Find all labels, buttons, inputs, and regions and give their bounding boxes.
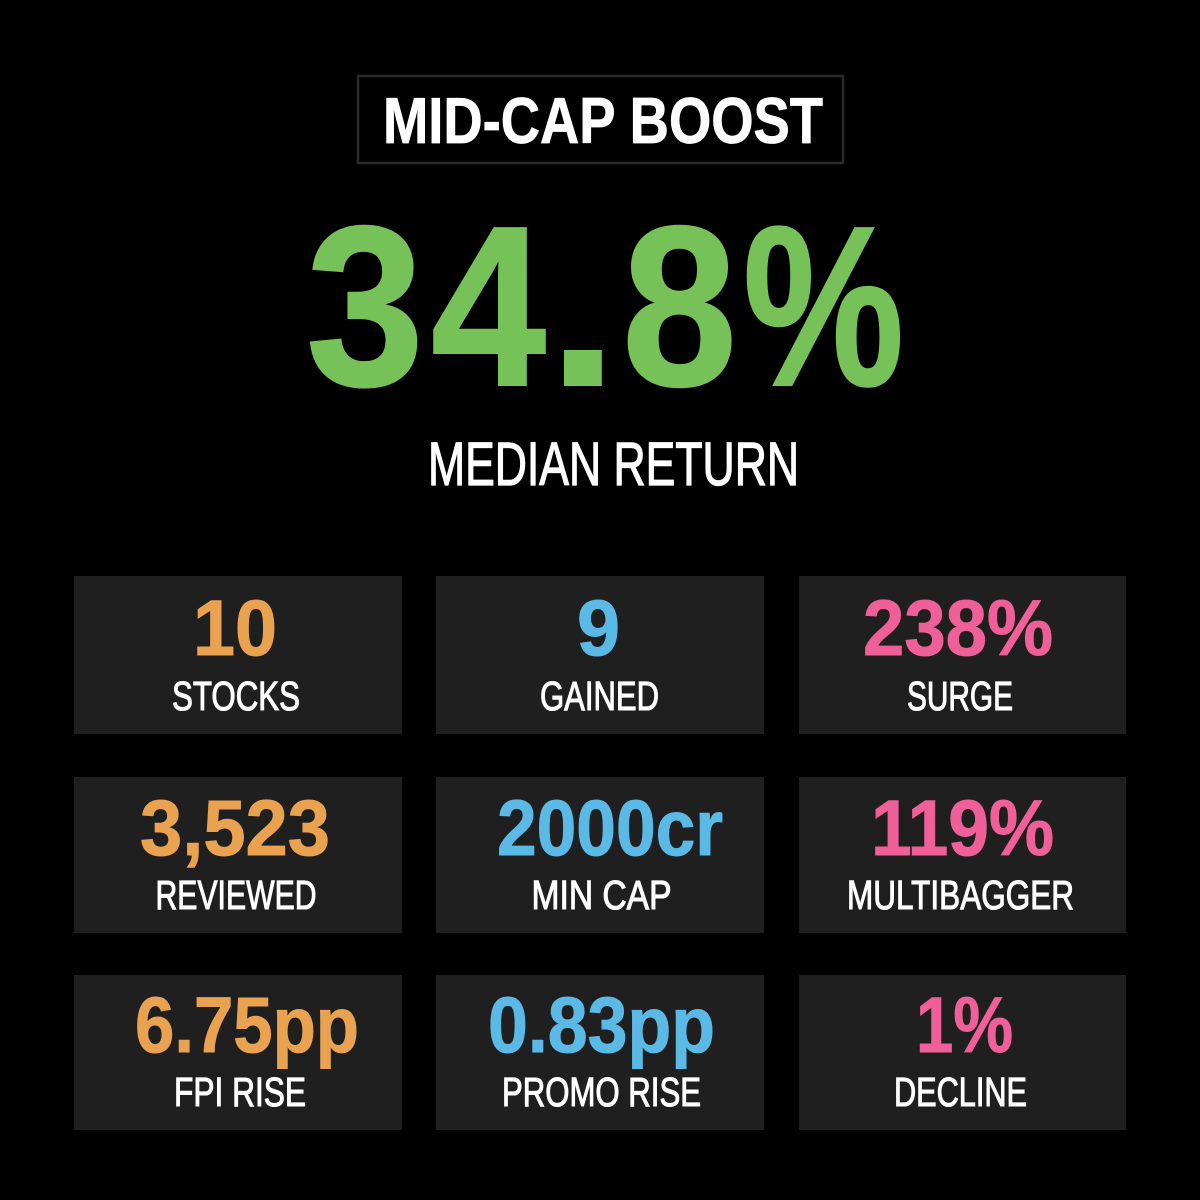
value: 9: [577, 583, 620, 672]
card: stocks: [74, 576, 402, 734]
label: PROMO RISE: [502, 1069, 701, 1115]
value: 0.83pp: [488, 980, 715, 1069]
label: GAINED: [540, 673, 659, 719]
value: 1%: [916, 980, 1013, 1069]
card: fpi rise: [74, 975, 402, 1130]
headline value: 4: [431, 180, 546, 434]
card: promo rise: [436, 975, 764, 1130]
label: SURGE: [907, 673, 1013, 719]
label: REVIEWED: [156, 872, 316, 918]
value: 2000cr: [497, 783, 723, 872]
value: 10: [193, 583, 277, 672]
value: 238%: [863, 583, 1053, 672]
value: 3,523: [140, 783, 330, 872]
value: 119%: [871, 783, 1054, 872]
card: surge: [799, 576, 1126, 734]
label: MIN CAP: [532, 872, 672, 918]
card: multibagger: [799, 777, 1126, 933]
value: 6.75pp: [135, 980, 359, 1069]
label: MULTIBAGGER: [847, 872, 1074, 918]
headline label: MEDIAN RETURN: [428, 430, 799, 498]
headline value: 8: [622, 180, 737, 434]
card: min cap: [436, 777, 764, 933]
card: decline: [799, 975, 1126, 1130]
label: STOCKS: [172, 673, 300, 719]
label: DECLINE: [894, 1069, 1027, 1115]
label: FPI RISE: [174, 1069, 306, 1115]
headline value: 3: [306, 180, 424, 434]
card: reviewed: [74, 777, 402, 933]
headline value: %: [743, 180, 904, 434]
card: gained: [436, 576, 764, 734]
title: MID-CAP BOOST: [383, 84, 823, 157]
headline value: .: [548, 180, 618, 434]
